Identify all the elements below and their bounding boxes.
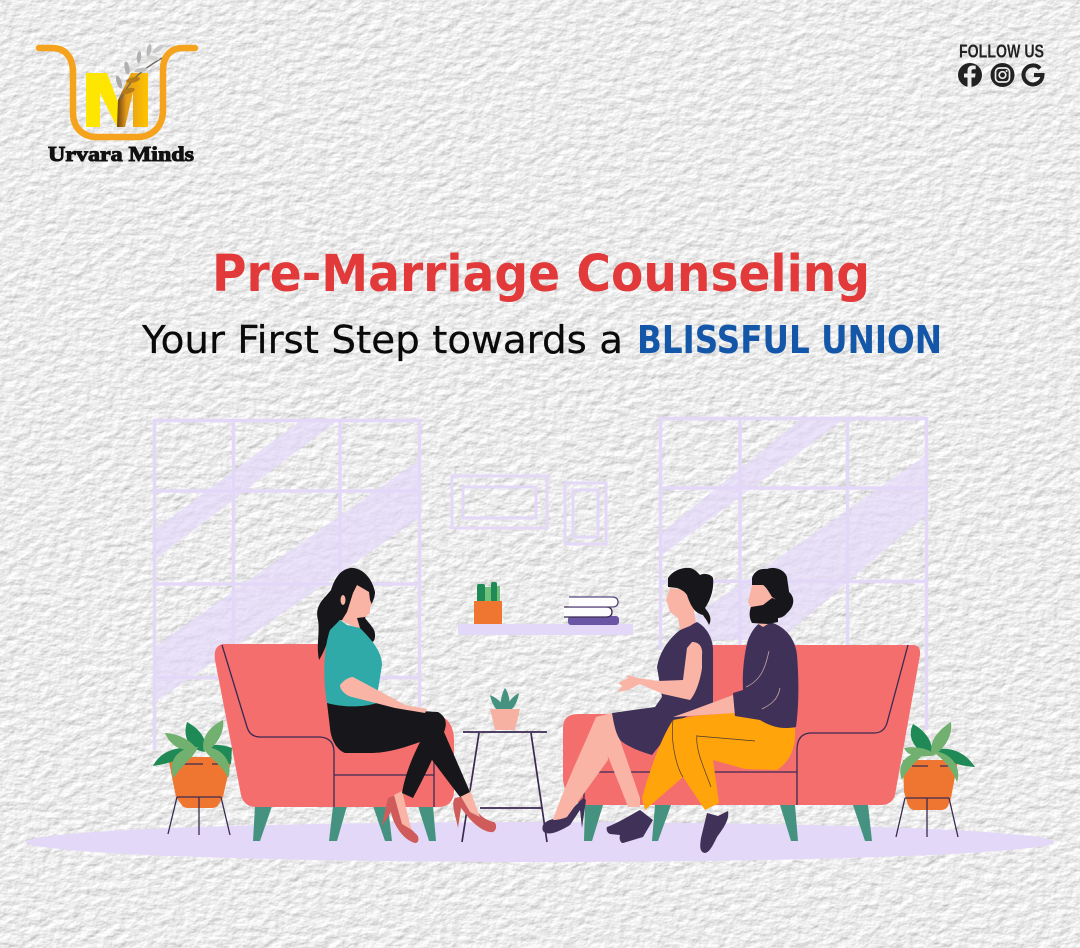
counsellor: right leg with heel	[420, 712, 496, 832]
logo: wheat sprig	[115, 43, 165, 100]
woman counsellor	[317, 568, 496, 843]
cactus pot	[474, 582, 502, 624]
tall frame	[565, 483, 606, 544]
left armchair	[215, 644, 454, 841]
sofa: seam lines	[584, 645, 908, 805]
social: follow us	[958, 42, 1044, 87]
armchair: seam lines	[222, 645, 434, 807]
client: back leg with heel	[542, 717, 608, 833]
counsellor: ear	[340, 595, 346, 605]
subtitle	[141, 318, 942, 362]
right plant	[896, 722, 975, 837]
table plant	[490, 688, 520, 730]
man client	[607, 568, 798, 853]
logo: Urvara Minds	[39, 43, 195, 166]
man: sweater creases	[746, 651, 780, 709]
armchair: legs	[253, 806, 436, 841]
counsellor: teal top	[324, 620, 382, 706]
armchair: body	[215, 644, 454, 807]
title: Pre-Marriage Counseling	[212, 245, 870, 304]
counsellor: left leg with heel	[327, 703, 444, 843]
right window	[660, 418, 926, 730]
client: arm and hand	[618, 642, 702, 700]
right window: light stripes	[661, 420, 926, 640]
right window: frame	[660, 418, 926, 730]
follow us label: FOLLOW US	[959, 42, 1044, 62]
logo: wordmark: Urvara Minds	[48, 142, 194, 166]
client: front leg	[595, 713, 640, 807]
man: hair	[752, 568, 793, 618]
floor shadow	[26, 822, 1054, 862]
sofa: body	[563, 645, 920, 805]
subtitle: lead phrase: Your First Step towards a	[141, 318, 623, 362]
woman client	[542, 568, 713, 833]
client: navy dress	[612, 622, 713, 755]
side table with plant	[462, 688, 547, 842]
man: face and neck	[748, 585, 778, 627]
subtitle: emphasis: BLISSFUL UNION	[637, 318, 942, 362]
left window: frame	[154, 420, 420, 750]
left plant: leaves	[153, 720, 232, 778]
wall picture frames	[452, 476, 606, 544]
counsellor: face and neck	[342, 585, 372, 628]
client: hair	[668, 568, 713, 625]
counsellor: arm	[340, 677, 427, 713]
icon: google	[1024, 65, 1042, 84]
stacked books	[564, 597, 619, 625]
right plant: stand	[896, 766, 958, 837]
shelf board	[458, 624, 633, 635]
man: beard	[750, 598, 778, 624]
man: front shoe	[607, 810, 653, 843]
logo: orange cup outline	[39, 48, 195, 137]
client: face and neck	[666, 588, 696, 630]
right plant: pot	[903, 760, 958, 810]
icon: facebook	[958, 63, 982, 87]
logo: letter M	[86, 73, 148, 127]
counsellor: hair back	[317, 568, 375, 660]
shelf with cactus and books	[458, 582, 633, 635]
man: rear shoe	[700, 811, 728, 853]
wide frame	[452, 476, 547, 528]
man: trouser creases	[672, 720, 755, 787]
left plant	[153, 720, 232, 835]
man: yellow trousers	[642, 713, 795, 810]
icon: instagram	[990, 63, 1014, 87]
man: arm	[673, 695, 735, 717]
sofa	[563, 645, 920, 841]
sofa: legs	[584, 805, 872, 841]
left plant: pot	[168, 757, 232, 808]
left plant: stand	[168, 764, 230, 835]
left window: light stripes	[154, 421, 419, 703]
man: sweater	[733, 621, 798, 728]
left window	[154, 420, 420, 750]
side table	[462, 732, 547, 842]
right plant: leaves	[900, 722, 975, 782]
